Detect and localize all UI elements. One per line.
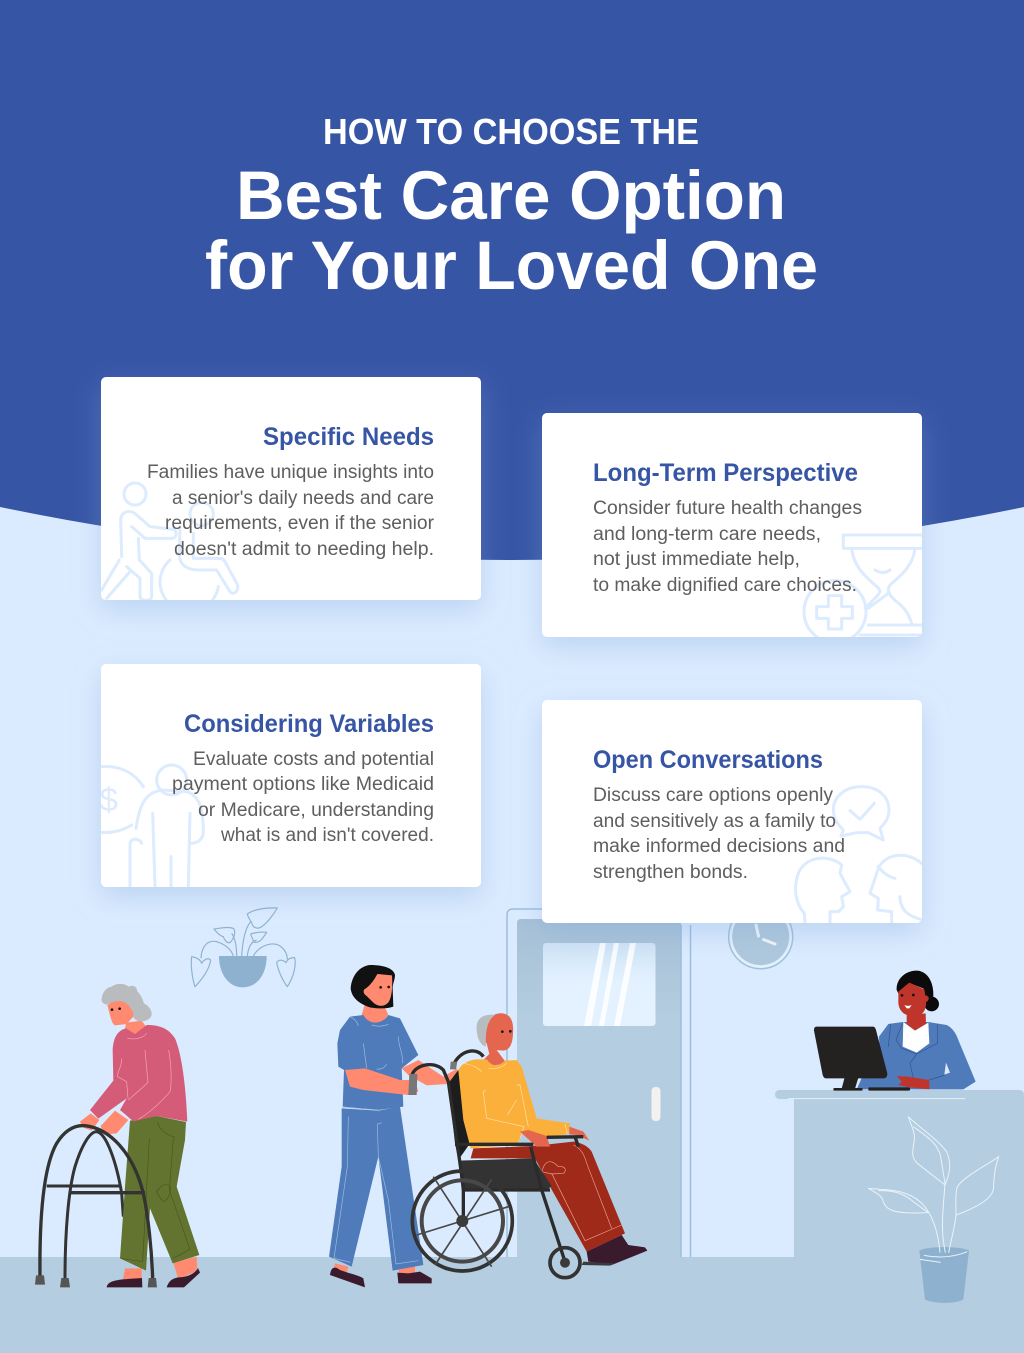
door handle — [652, 1087, 660, 1121]
trousers — [120, 1116, 199, 1271]
receptionist hair bun — [924, 997, 939, 1011]
body text: what is and isn't covered. — [220, 825, 434, 846]
nurse front arm — [345, 1068, 418, 1095]
monitor stand — [842, 1072, 860, 1089]
icon: two heads with speech bubble — [796, 787, 923, 925]
small wheel hub — [560, 1258, 570, 1268]
body text: strengthen bonds. — [593, 862, 748, 883]
title — [205, 111, 818, 304]
receptionist neck — [907, 1013, 926, 1031]
tyre — [412, 1171, 512, 1271]
icon: senior with cane and dollar coin — [99, 765, 203, 887]
man eyes — [501, 1030, 504, 1033]
title line 2: for Your Loved One — [205, 227, 818, 304]
keyboard — [868, 1087, 910, 1091]
receptionist shirt — [903, 1022, 929, 1053]
body text: make informed decisions and — [593, 836, 845, 857]
door — [507, 909, 690, 1257]
panel: specific needs — [101, 377, 481, 611]
desk plant leaves — [868, 1117, 999, 1262]
wheelchair frame — [412, 1051, 583, 1262]
big wheel — [412, 1171, 512, 1271]
body text — [147, 462, 435, 560]
man hair — [477, 1015, 495, 1047]
body text: Consider future health changes — [593, 498, 862, 519]
body text: Evaluate costs and potential — [193, 749, 434, 770]
sweater — [90, 1025, 187, 1122]
nurse shirt — [337, 1015, 418, 1110]
title kicker: HOW TO CHOOSE THE — [323, 111, 699, 152]
card — [542, 700, 922, 923]
spokes — [417, 1177, 508, 1267]
desk highlight line — [788, 1097, 965, 1100]
card — [101, 664, 481, 887]
clock outer ring — [729, 905, 793, 969]
face — [107, 1000, 135, 1025]
gap between arm and torso — [944, 1063, 950, 1075]
wall clock — [729, 905, 793, 969]
nurse hair — [351, 965, 395, 1008]
nurse shoes — [330, 1268, 432, 1287]
handle grips — [408, 1062, 457, 1095]
hands — [80, 1111, 128, 1135]
floor — [0, 1257, 1024, 1353]
icon: hourglass and medical cross — [804, 535, 923, 643]
door window — [543, 943, 656, 1026]
body text: Discuss care options openly — [593, 785, 833, 806]
receptionist jacket — [857, 1022, 976, 1089]
desk body — [794, 1097, 1024, 1257]
body text: payment options like Medicaid — [172, 774, 434, 795]
body text: or Medicare, understanding — [198, 800, 434, 821]
card — [101, 377, 481, 600]
monitor base — [833, 1088, 863, 1091]
title line 1: Best Care Option — [236, 157, 786, 234]
receptionist hair — [897, 971, 933, 1000]
card — [542, 413, 922, 637]
body text: a senior's daily needs and care — [172, 488, 434, 509]
outer walker arch and bar — [40, 1126, 153, 1278]
illustration: nurse pushing man in wheelchair — [329, 965, 647, 1287]
man shoe — [587, 1235, 647, 1265]
desk plant pot — [919, 1247, 969, 1303]
body text: doesn't admit to needing help. — [174, 539, 434, 560]
man head and neck — [483, 1013, 513, 1067]
body text — [593, 785, 845, 883]
receptionist smile — [904, 1005, 912, 1008]
receptionist ear — [922, 995, 929, 1002]
illustration: senior woman with walker — [35, 984, 200, 1287]
background: blue header with curved edge — [0, 0, 1024, 560]
seat — [458, 1158, 552, 1190]
body text: and sensitively as a family to — [593, 811, 836, 832]
wheel hub — [456, 1215, 468, 1227]
heading: Specific Needs — [263, 423, 434, 451]
man hands — [520, 1127, 589, 1147]
body text: not just immediate help, — [593, 549, 800, 570]
feet and shoes — [123, 1257, 197, 1281]
nurse eyes — [379, 986, 382, 989]
body text — [593, 498, 862, 596]
nurse rear arm — [402, 1060, 457, 1085]
eyes — [111, 1008, 113, 1011]
panel: open conversations — [542, 700, 923, 925]
panel: considering variables — [99, 664, 481, 887]
body text — [172, 749, 434, 846]
icon: caregiver with wheelchair — [102, 483, 238, 611]
hair — [102, 984, 152, 1021]
door frame line — [507, 909, 600, 1257]
small wheel — [550, 1248, 580, 1278]
receptionist face — [898, 983, 926, 1016]
body text: requirements, even if the senior — [165, 513, 435, 534]
man sweater — [458, 1059, 570, 1148]
door panel — [517, 919, 681, 1257]
body text: Families have unique insights into — [147, 462, 434, 483]
window glare — [584, 943, 636, 1026]
man trousers — [471, 1142, 625, 1252]
door frame right — [681, 925, 690, 1257]
nurse trousers — [329, 1107, 423, 1271]
heading: Open Conversations — [593, 746, 823, 774]
inner walker arch — [47, 1132, 123, 1278]
nurse ankles — [334, 1263, 415, 1275]
heading: Long-Term Perspective — [593, 459, 858, 487]
desk top — [775, 1090, 1024, 1099]
receptionist hand — [897, 1076, 929, 1089]
nurse neck — [362, 1003, 388, 1023]
walker feet — [35, 1275, 157, 1287]
clock face — [732, 908, 789, 965]
reception desk — [775, 971, 1024, 1303]
body text: and long-term care needs, — [593, 524, 821, 545]
wheelchair back — [448, 1070, 470, 1160]
heading: Considering Variables — [184, 710, 434, 738]
receptionist eyes — [901, 994, 903, 997]
monitor — [814, 1027, 887, 1078]
panel: long-term perspective — [542, 413, 923, 643]
clock hands — [756, 925, 775, 944]
body text: to make dignified care choices. — [593, 575, 857, 596]
nurse face — [364, 974, 392, 1006]
icon: senior with cane and dollar coin: $ — [99, 782, 118, 819]
rim — [422, 1180, 503, 1262]
hanging plant — [191, 908, 295, 987]
neck — [125, 1021, 147, 1034]
jacket lapels — [888, 1023, 945, 1080]
